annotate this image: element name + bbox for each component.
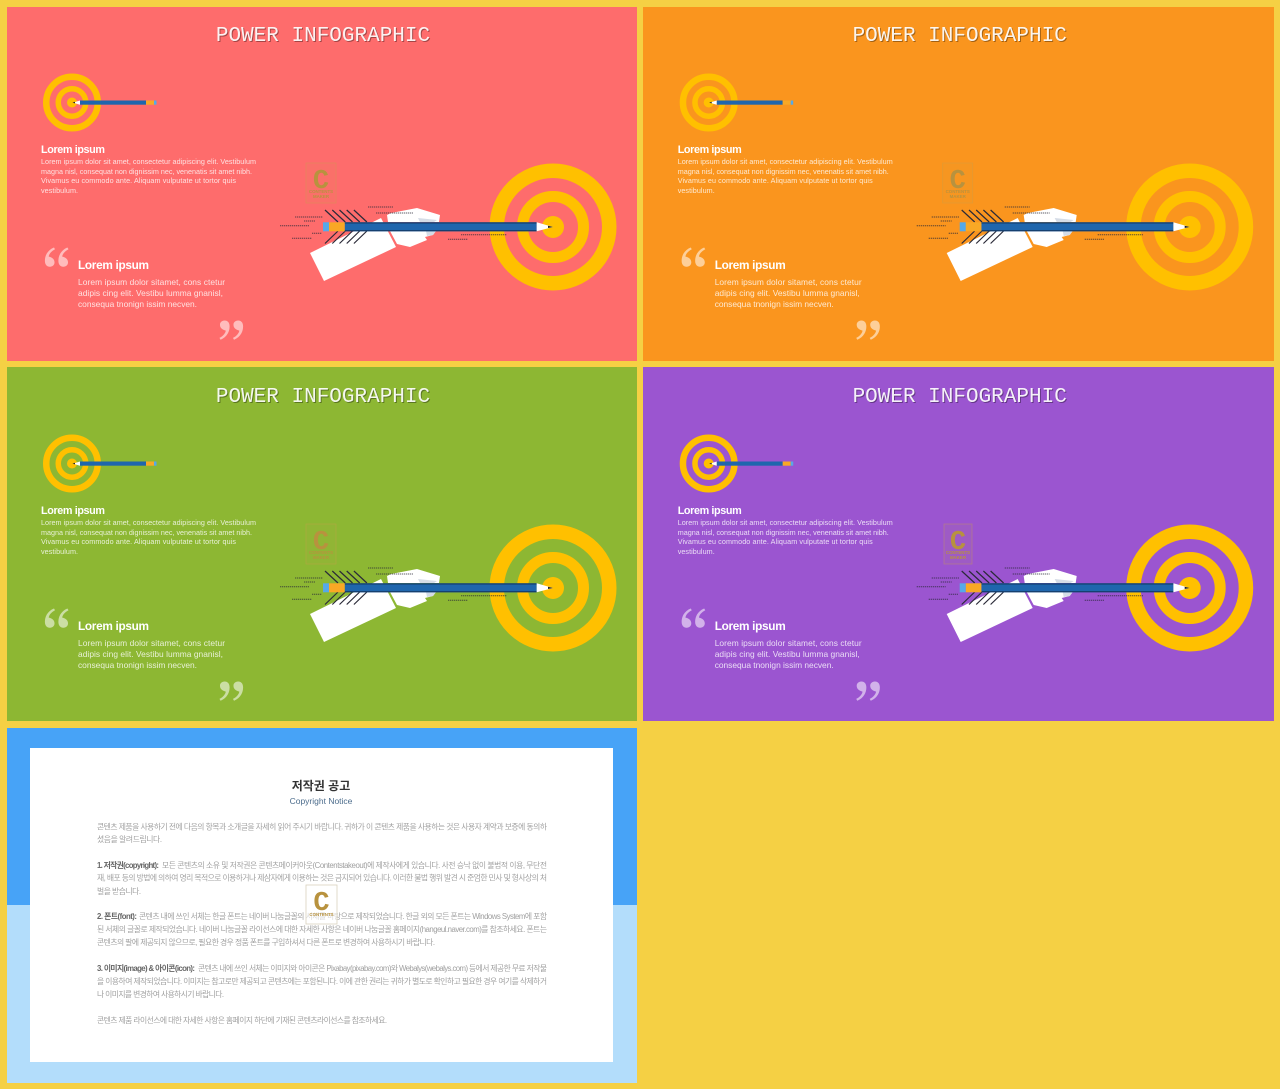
quote block: adipis cing elit. Vestibu lumma gnanisl, (715, 649, 860, 659)
quote block: ” (215, 666, 275, 752)
text block: intro: Lorem ipsum dolor sit amet, consectetur adipiscing elit. Vestibulum (678, 518, 893, 527)
text block: notice body: 된 서체의 글꼴로 제작되었습니다. 네이버 나눔글꼴 라이선스에 대한 자세한 사항은 네이버 나눔글꼴 홈페이지(hangeul.naver.com)를 참조하세요. 폰트는 (97, 924, 547, 934)
logo badge: MAKER (950, 555, 967, 560)
text block: intro: Lorem ipsum (41, 505, 105, 517)
logo badge: MAKER (950, 194, 967, 199)
quote block: “ (650, 593, 710, 679)
quote block: “ (650, 232, 710, 318)
logo badge: CONTENTS (946, 550, 970, 555)
text block: notice body (97, 822, 547, 1025)
text block: intro: vestibulum. (41, 547, 78, 556)
quote block: Lorem ipsum dolor sitamet, cons ctetur (715, 277, 862, 287)
text block: intro: Lorem ipsum (678, 505, 742, 517)
text block: notice body: 벌을 받습니다. (97, 886, 141, 896)
text block: notice body: 셨음을 알려드립니다. (97, 834, 162, 844)
title: POWER INFOGRAPHIC (854, 26, 1068, 49)
logo badge: MAKER (313, 555, 330, 560)
text block: intro (41, 144, 256, 195)
text block: intro: Lorem ipsum (678, 144, 742, 156)
illustration: hand throwing pencil at target (917, 532, 1246, 644)
quote block: Lorem ipsum (715, 258, 786, 272)
logo badge (306, 163, 336, 203)
title: POWER INFOGRAPHIC (853, 386, 1067, 409)
text block: notice body: 을 이용하여 제작되었습니다. 이미지는 참고로만 제공되고 콘텐츠에는 포함된니다. 이에 관한 권리는 귀하가 별도로 확인하고 필요한 경우 여기를 삭제하거 (97, 976, 547, 986)
text block: notice body: 2. 폰트(font): (97, 912, 137, 921)
text block: intro (678, 144, 893, 195)
logo badge: CONTENTS (309, 189, 333, 194)
logo badge (944, 524, 972, 564)
title: POWER INFOGRAPHIC (217, 26, 431, 49)
quote block: adipis cing elit. Vestibu lumma gnanisl, (78, 649, 223, 659)
logo badge: C (313, 167, 329, 197)
title: POWER INFOGRAPHIC (853, 25, 1067, 48)
text block: intro: magna nisl, consequat non dignissim nec, venenatis sit amet nibh. (41, 528, 252, 537)
title: POWER INFOGRAPHIC (217, 387, 431, 410)
text block: notice body: 1. 저작권(copyright): (97, 860, 159, 870)
illustration: hand throwing pencil at target (280, 532, 609, 644)
quote block (13, 593, 275, 752)
title: POWER INFOGRAPHIC (216, 386, 430, 409)
quote block (650, 232, 912, 391)
text block: intro: Lorem ipsum dolor sit amet, consectetur adipiscing elit. Vestibulum (678, 157, 893, 166)
icon: small target and pencil (683, 77, 793, 128)
quote block (650, 593, 912, 752)
quote block: consequa tnonign issim necven. (78, 660, 197, 670)
text block: intro: magna nisl, consequat non dignissim nec, venenatis sit amet nibh. (678, 528, 889, 537)
panel: pink (7, 7, 637, 391)
logo badge (306, 524, 336, 564)
logo badge: C (313, 889, 330, 919)
logo badge (306, 885, 337, 924)
quote block: consequa tnonign issim necven. (715, 299, 834, 309)
text block: notice body: 모든 콘텐츠의 소유 및 저작권은 콘텐츠메이커아웃(Contentstakeout)에 제작사에게 있습니다. 사전 승낙 없이 불법적 이용, 무단전 (162, 860, 547, 870)
logo badge: CONTENTS (946, 189, 970, 194)
logo badge: MAKER (313, 194, 330, 199)
text block: notice body: 콘텐츠 제품 라이선스에 대한 자세한 사항은 홈페이지 하단에 기재된 콘텐츠라이선스를 참조하세요. (97, 1015, 387, 1025)
quote block: “ (13, 593, 73, 679)
quote block: consequa tnonign issim necven. (78, 299, 197, 309)
text block: intro (41, 505, 256, 556)
text block: intro: magna nisl, consequat non dignissim nec, venenatis sit amet nibh. (678, 167, 889, 176)
text block: notice body: 콘텐츠의 팔에 제공되지 않으므로, 필요한 경우 정품 폰트를 구입하셔서 다른 폰트로 변경하여 사용하시기 바랍니다. (97, 937, 435, 947)
illustration: hand throwing pencil at target (917, 171, 1246, 283)
subheading: Copyright Notice (290, 796, 353, 806)
text block: intro: Vivamus eu commodo ante. Aliquam vulputate ut tortor quis (678, 537, 873, 546)
text block: intro: Vivamus eu commodo ante. Aliquam vulputate ut tortor quis (41, 176, 236, 185)
text block: notice body: 3. 이미지(image) & 아이콘(icon): (97, 963, 195, 973)
text block: intro: Lorem ipsum dolor sit amet, consectetur adipiscing elit. Vestibulum (41, 157, 256, 166)
text block: intro: Lorem ipsum (41, 144, 105, 156)
panel: green (7, 367, 637, 752)
quote block: Lorem ipsum dolor sitamet, cons ctetur (78, 277, 225, 287)
heading: 저작권 공고 (292, 778, 350, 793)
text block: notice body: 콘텐츠 내에 쓰인 서체는 한글 폰트는 네이버 나눔글꼴의 서체를 바탕으로 제작되었습니다. 한글 외의 모든 폰트는 Windows System에 포함 (139, 911, 547, 921)
text block: notice body: 나 이미지를 변경하여 사용하시기 바랍니다. (97, 989, 224, 999)
logo badge: CONTENTS (309, 912, 334, 917)
text block: intro: Vivamus eu commodo ante. Aliquam vulputate ut tortor quis (678, 176, 873, 185)
quote block: Lorem ipsum (78, 258, 149, 272)
text block: intro: Vivamus eu commodo ante. Aliquam vulputate ut tortor quis (41, 537, 236, 546)
text block: intro: vestibulum. (41, 186, 78, 195)
quote block: consequa tnonign issim necven. (715, 660, 834, 670)
icon: small target and pencil (46, 77, 156, 128)
text block: intro (678, 505, 893, 556)
quote block: Lorem ipsum dolor sitamet, cons ctetur (715, 638, 862, 648)
text block: notice body: 콘텐츠 제품을 사용하기 전에 다음의 항목과 소개글을 자세히 읽어 주시기 바랍니다. 귀하가 이 콘텐츠 제품을 사용하는 것은 사용자 계약과 보증에 동의하 (97, 822, 547, 832)
quote block: ” (852, 666, 912, 752)
quote block (13, 232, 275, 391)
title: POWER INFOGRAPHIC (854, 387, 1068, 410)
quote block: Lorem ipsum (78, 619, 149, 633)
text block: intro: magna nisl, consequat non dignissim nec, venenatis sit amet nibh. (41, 167, 252, 176)
quote block: adipis cing elit. Vestibu lumma gnanisl, (78, 288, 223, 298)
logo badge: C (950, 167, 966, 197)
panel: orange (643, 7, 1274, 391)
illustration: hand throwing pencil at target (280, 171, 609, 283)
panel: purple (643, 367, 1274, 752)
text block: intro: vestibulum. (678, 186, 715, 195)
logo badge: CONTENTS (309, 550, 333, 555)
icon: small target and pencil (683, 438, 793, 489)
logo badge: C (950, 528, 966, 558)
quote block: adipis cing elit. Vestibu lumma gnanisl, (715, 288, 860, 298)
quote block: ” (215, 305, 275, 391)
icon: small target and pencil (46, 438, 156, 489)
quote block: Lorem ipsum (715, 619, 786, 633)
text block: notice body: 콘텐츠 내에 쓰인 서체는 이미지와 아이콘은 Pixabay(pixabay.com)와 Webalys(webalys.com) 등에서 제공한 무료 저작물 (198, 963, 547, 973)
logo badge: C (313, 528, 329, 558)
logo badge (943, 163, 973, 203)
text block: intro: vestibulum. (678, 547, 715, 556)
quote block: ” (852, 305, 912, 391)
text block: intro: Lorem ipsum dolor sit amet, consectetur adipiscing elit. Vestibulum (41, 518, 256, 527)
text block: notice body: 재, 배포 등의 방법에 의하여 영리 목적으로 이용하거나 제삼자에게 이용하는 것은 금지되어 있습니다. 이러한 불법 행위 발견 시 준엄한 민사 및 형사상의 처 (97, 872, 547, 882)
panel: copyright notice (7, 728, 637, 1083)
quote block: “ (13, 232, 73, 318)
quote block: Lorem ipsum dolor sitamet, cons ctetur (78, 638, 225, 648)
title: POWER INFOGRAPHIC (216, 25, 430, 48)
